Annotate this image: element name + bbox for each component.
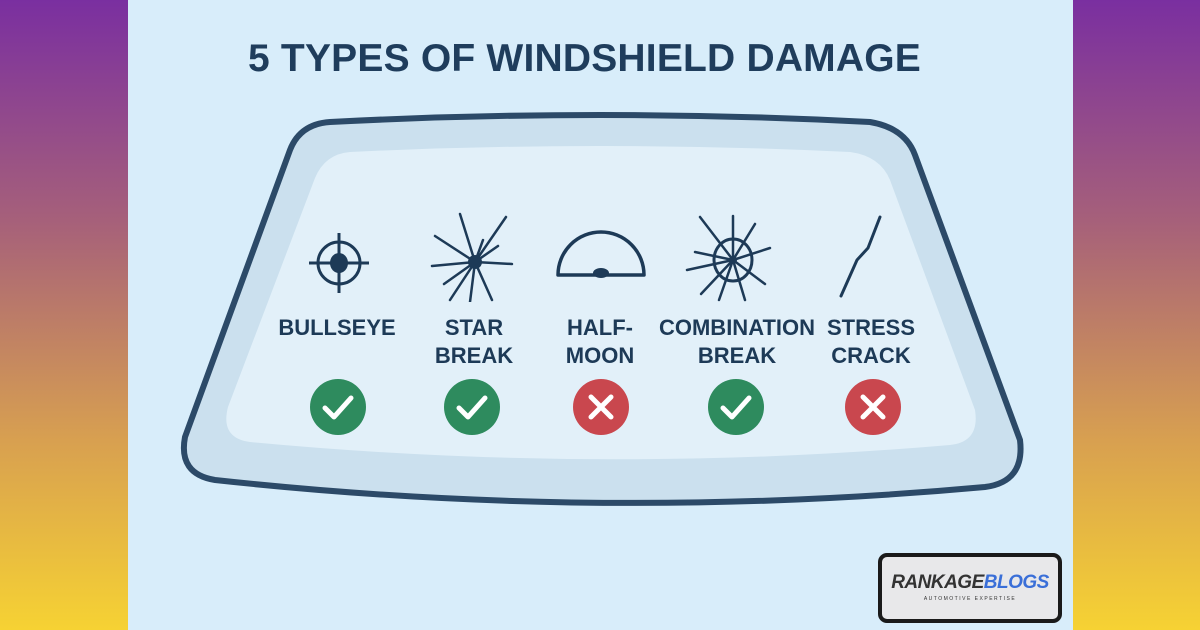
icon: stress crack — [839, 216, 882, 298]
label: half-moon — [566, 315, 634, 368]
label: star break — [435, 315, 513, 368]
icon: star break — [430, 212, 514, 302]
right gradient strip — [1073, 0, 1200, 630]
check: bullseye — [310, 379, 366, 435]
label: half-moon: MOON — [566, 343, 634, 368]
label: star break: BREAK — [435, 343, 513, 368]
label: combination break: COMBINATION — [659, 315, 815, 340]
icon: combination break — [686, 214, 772, 302]
cross: stress crack — [845, 379, 901, 435]
label: star break: STAR — [445, 315, 503, 340]
icon: bullseye — [309, 233, 369, 293]
label: half-moon: HALF- — [567, 315, 633, 340]
check: star break — [444, 379, 500, 435]
cross: half-moon — [573, 379, 629, 435]
icon: half-moon — [556, 230, 646, 278]
label: combination break — [659, 315, 815, 368]
left gradient strip — [0, 0, 128, 630]
logo: rankage blogs — [878, 553, 1062, 623]
logo: rankage blogs: AUTOMOTIVE EXPERTISE — [924, 596, 1016, 602]
label: stress crack: CRACK — [831, 343, 911, 368]
logo: rankage blogs: RANKAGEBLOGS — [891, 572, 1049, 593]
check: combination break — [708, 379, 764, 435]
label: stress crack — [827, 315, 915, 368]
label: bullseye: BULLSEYE — [278, 315, 396, 340]
label: stress crack: STRESS — [827, 315, 915, 340]
title: 5 TYPES OF WINDSHIELD DAMAGE — [248, 37, 921, 80]
label: combination break: BREAK — [698, 343, 776, 368]
